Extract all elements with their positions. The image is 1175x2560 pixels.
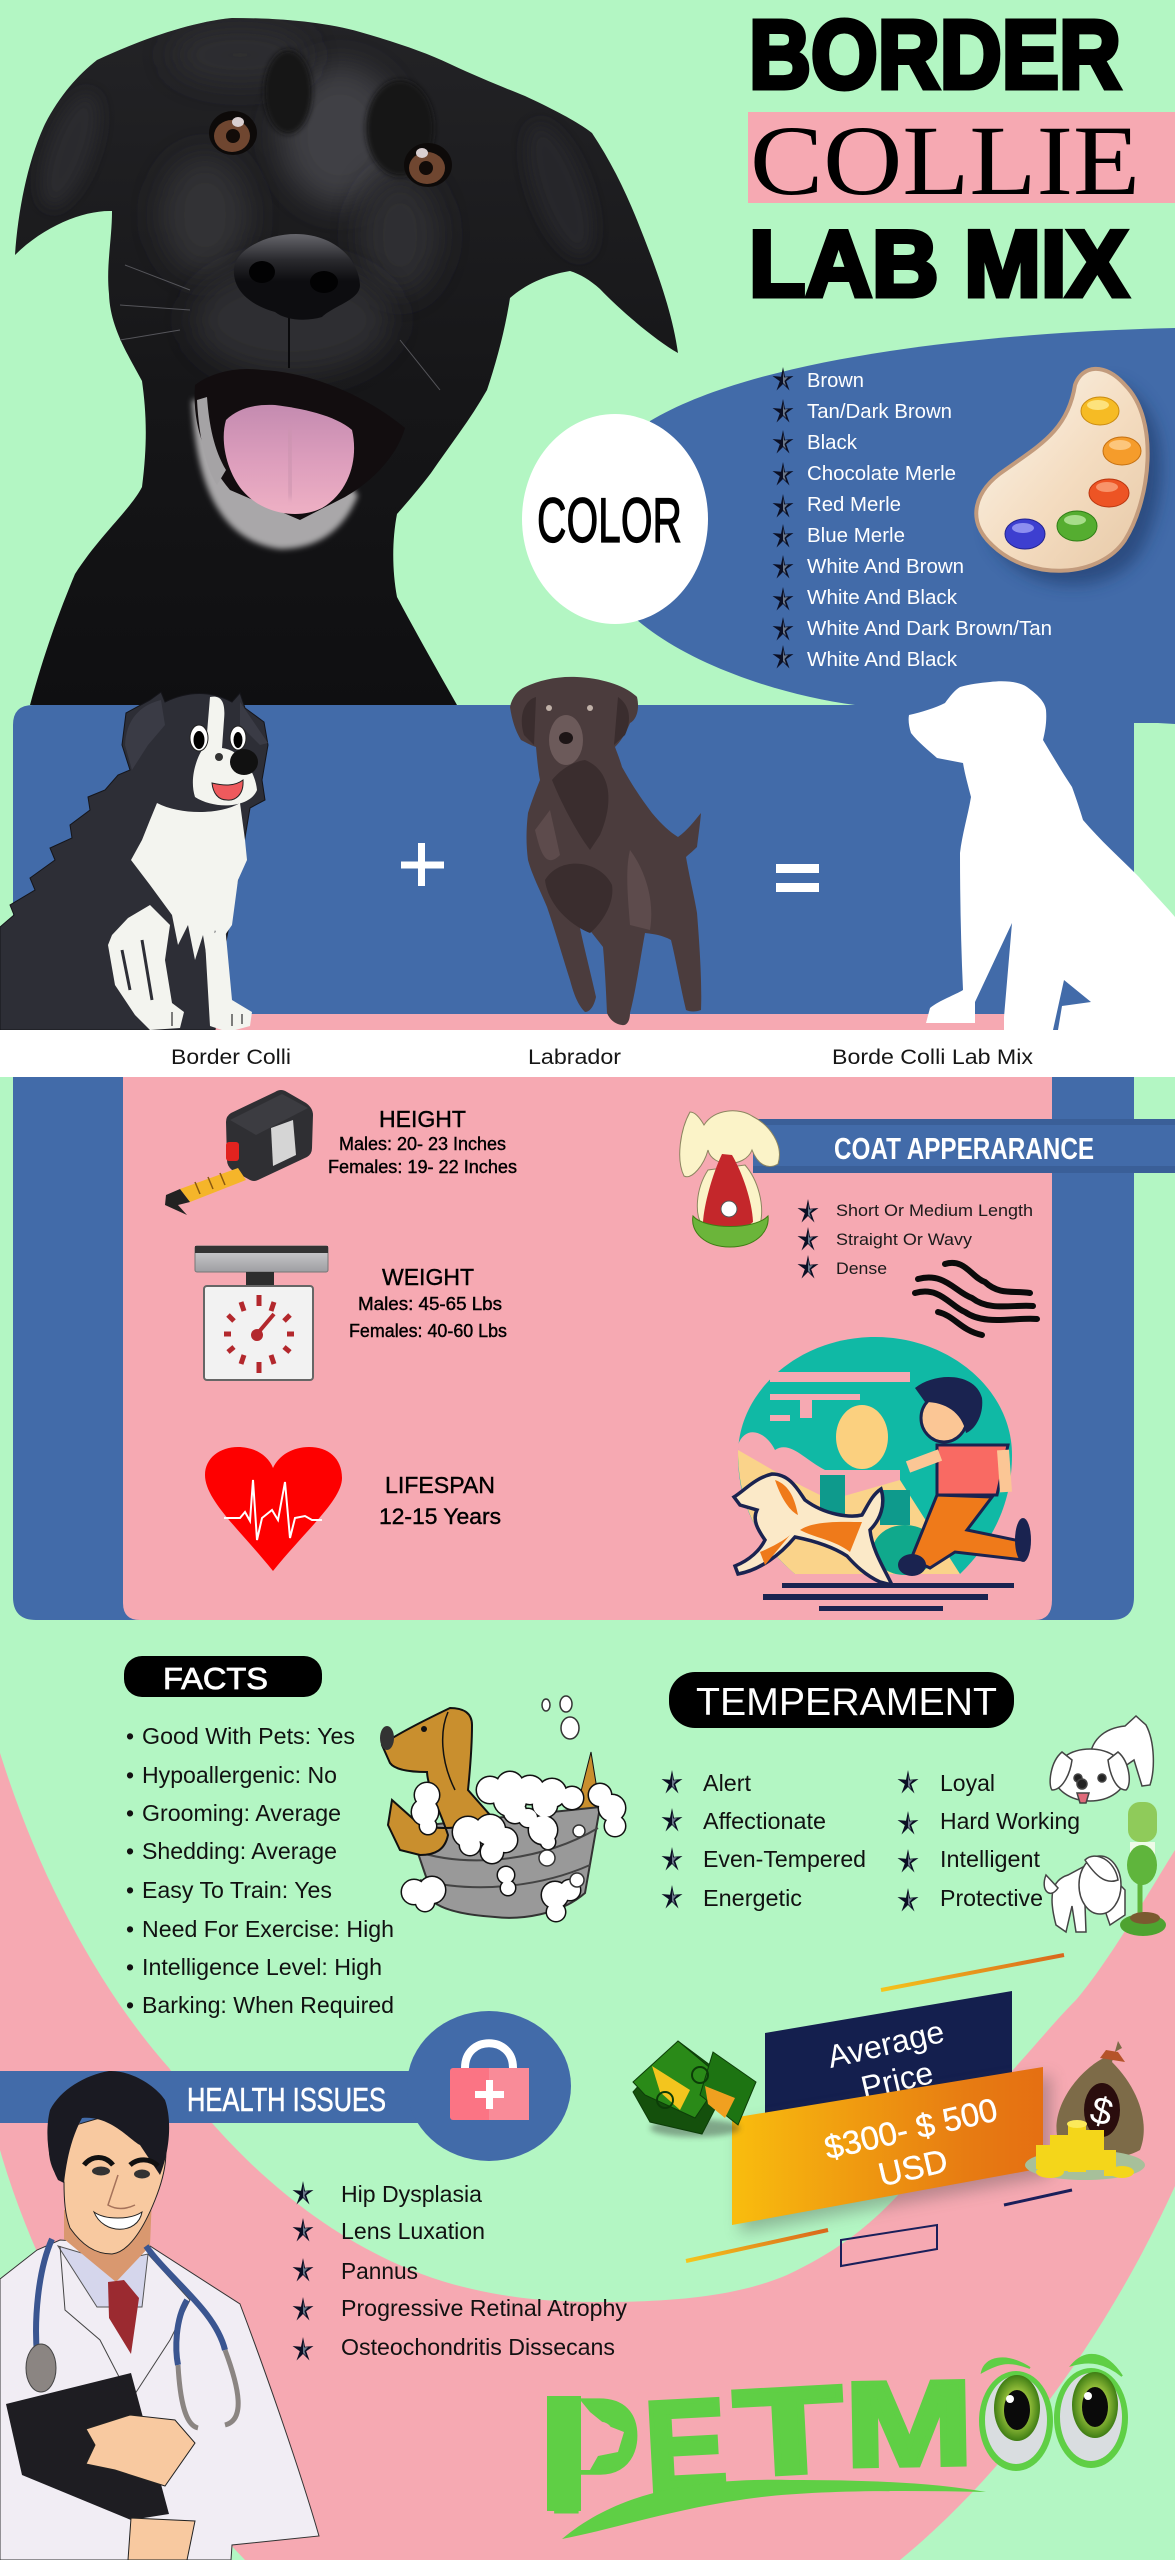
color list: Black <box>807 432 858 454</box>
title: BORDER <box>749 0 1121 109</box>
breed label band <box>0 1030 1175 1077</box>
right eye <box>1054 2355 1128 2468</box>
health issues list: Progressive Retinal Atrophy <box>341 2295 627 2321</box>
left eye <box>979 2358 1053 2471</box>
facts list: • <box>126 1916 134 1942</box>
brows <box>264 50 312 134</box>
facts list: • <box>126 1877 134 1903</box>
logo: petmoo <box>547 2355 1128 2545</box>
lifespan text: LIFESPAN <box>385 1472 495 1498</box>
temperament list: Affectionate <box>703 1808 826 1834</box>
accent lines and box <box>686 2190 1072 2266</box>
face <box>49 2112 166 2254</box>
icon: weighing scale <box>195 1246 328 1380</box>
photo: black dog <box>15 18 678 705</box>
coat appearance banner <box>753 1119 1175 1173</box>
price card <box>732 1991 1051 2233</box>
front leg right <box>205 925 252 1032</box>
coat list: Straight Or Wavy <box>836 1230 973 1249</box>
health issues header <box>0 2011 571 2161</box>
facts heading <box>124 1656 322 1697</box>
temperament list: Intelligent <box>940 1846 1041 1872</box>
nose <box>234 234 360 320</box>
chin fur <box>192 400 358 549</box>
tablet <box>6 2373 169 2520</box>
illustration: boy running with dog <box>734 1337 1031 1611</box>
facts list: • <box>126 1800 134 1826</box>
boy <box>911 1495 1023 1568</box>
weight text <box>349 1264 507 1341</box>
icon: paint palette <box>976 369 1162 585</box>
logo: petmoo: E <box>641 2371 731 2522</box>
title: COLLIE <box>750 105 1140 216</box>
icon: tape measure <box>165 1090 313 1215</box>
illustration: puppy eating <box>1044 1802 1166 1936</box>
health issues list <box>292 2181 627 2360</box>
ears <box>125 700 268 770</box>
icon: bunny eating <box>680 1111 779 1247</box>
stethoscope <box>36 2239 225 2354</box>
lifespan text <box>379 1472 501 1529</box>
health issues list: Osteochondritis Dissecans <box>341 2334 615 2360</box>
facts heading: FACTS <box>163 1661 268 1696</box>
facial features <box>84 2158 158 2166</box>
plus sign <box>401 843 444 886</box>
panel: breeds <box>13 705 1175 1030</box>
icon: wavy coat <box>915 1263 1037 1335</box>
icon: money bag <box>1056 2041 1144 2158</box>
facts list: Shedding: Average <box>142 1838 337 1864</box>
foam <box>402 1772 625 1921</box>
temperament list: Even-Tempered <box>703 1846 866 1872</box>
temperament list: Alert <box>703 1770 752 1796</box>
lifespan text: 12-15 Years <box>379 1504 501 1529</box>
weight text: Females: 40-60 Lbs <box>349 1321 507 1341</box>
accent line: yellow <box>881 1955 1064 1990</box>
color list: White And Black <box>807 649 958 671</box>
color badge: COLOR <box>537 486 682 556</box>
illustration: mix silhouette <box>909 681 1175 1030</box>
head <box>193 697 257 805</box>
title <box>748 0 1175 316</box>
bubbles <box>539 1696 585 1887</box>
facts list: Grooming: Average <box>142 1800 341 1826</box>
breed label band: Labrador <box>528 1046 621 1069</box>
mouth <box>195 369 405 520</box>
temperament list: Hard Working <box>940 1808 1080 1834</box>
illustration: border collie <box>0 692 268 1032</box>
color list <box>772 367 1052 671</box>
color list: Tan/Dark Brown <box>807 401 952 423</box>
breed label band: Borde Colli Lab Mix <box>832 1046 1034 1069</box>
health issues list: Hip Dysplasia <box>341 2181 482 2207</box>
facts list: Easy To Train: Yes <box>142 1877 332 1903</box>
illustration: dog in bath <box>380 1696 625 1921</box>
color list: White And Dark Brown/Tan <box>807 618 1052 640</box>
front leg left <box>108 905 184 1030</box>
lapels <box>60 2246 190 2400</box>
coat list <box>798 1199 1033 1278</box>
logo: petmoo: T <box>732 2360 847 2502</box>
pink curved background <box>0 1620 1175 2560</box>
height text <box>328 1106 517 1177</box>
panel: stats <box>13 1077 1134 1620</box>
height text: HEIGHT <box>379 1106 466 1132</box>
dog <box>734 1474 892 1585</box>
shirt <box>58 2246 148 2307</box>
fur shading <box>29 27 607 375</box>
facts list: • <box>126 1954 134 1980</box>
logo: petmoo: P <box>547 2366 640 2545</box>
health issues list: Pannus <box>341 2258 418 2284</box>
color list: Blue Merle <box>807 525 905 547</box>
equals sign <box>776 864 819 892</box>
temperament list: Protective <box>940 1885 1043 1911</box>
breed label band: Border Colli <box>171 1046 291 1069</box>
icon: medical bag <box>450 2043 529 2120</box>
temperament list: Energetic <box>703 1885 802 1911</box>
color list: White And Brown <box>807 556 964 578</box>
icon: money stacks <box>633 2041 756 2137</box>
height text: Males: 20- 23 Inches <box>339 1134 506 1154</box>
facts list: Intelligence Level: High <box>142 1954 382 1980</box>
ground lines <box>763 1583 1014 1611</box>
color badge <box>522 414 708 624</box>
price card: USD <box>875 2142 951 2193</box>
weight text: WEIGHT <box>382 1264 474 1290</box>
tie <box>108 2280 139 2354</box>
tongue <box>224 405 354 514</box>
illustration: puppy playing <box>1050 1716 1153 1803</box>
temperament list <box>662 1770 1080 1912</box>
height text: Females: 19- 22 Inches <box>328 1157 517 1177</box>
facts list: Good With Pets: Yes <box>142 1723 355 1749</box>
facts list: • <box>126 1992 134 2018</box>
neck <box>64 2195 152 2282</box>
illustration: doctor <box>0 2071 319 2560</box>
hand upper <box>86 2415 195 2486</box>
icon: heart <box>205 1447 342 1571</box>
temperament heading <box>669 1672 1014 1728</box>
coat list: Short Or Medium Length <box>836 1201 1033 1220</box>
icon: money bag: $ <box>1086 2089 1117 2135</box>
eyes <box>209 111 257 155</box>
panel: color blob <box>620 328 1175 724</box>
facts list: • <box>126 1762 134 1788</box>
health issues list: Lens Luxation <box>341 2218 485 2244</box>
color list: Red Merle <box>807 494 901 516</box>
title: LAB MIX <box>749 211 1128 316</box>
chest fur <box>131 803 247 965</box>
color list: Brown <box>807 370 864 392</box>
shading <box>552 760 608 850</box>
whiskers <box>120 265 440 390</box>
logo: petmoo: M <box>844 2356 974 2492</box>
price card: Price <box>857 2054 937 2106</box>
facts list: Hypoallergenic: No <box>142 1762 337 1788</box>
price card: $300- $ 500 <box>821 2091 1001 2166</box>
facts list: • <box>126 1838 134 1864</box>
hand lower <box>128 2518 195 2560</box>
weight text: Males: 45-65 Lbs <box>358 1294 502 1314</box>
swoosh <box>562 2480 986 2539</box>
facts list: Need For Exercise: High <box>142 1916 394 1942</box>
health issues header: HEALTH ISSUES <box>187 2081 386 2118</box>
temperament heading: TEMPERAMENT <box>696 1681 997 1724</box>
temperament list: Loyal <box>940 1770 995 1796</box>
price card: Average <box>824 2013 948 2075</box>
icon: coins <box>1025 2120 1145 2180</box>
color list: Chocolate Merle <box>807 463 956 485</box>
hair <box>47 2071 169 2183</box>
facts list <box>126 1723 394 2018</box>
facts list: • <box>126 1723 134 1749</box>
coat list: Dense <box>836 1259 887 1278</box>
facts list: Barking: When Required <box>142 1992 394 2018</box>
coat appearance banner: COAT APPERARANCE <box>834 1131 1094 1166</box>
illustration: labrador <box>510 677 701 1025</box>
color list: White And Black <box>807 587 958 609</box>
